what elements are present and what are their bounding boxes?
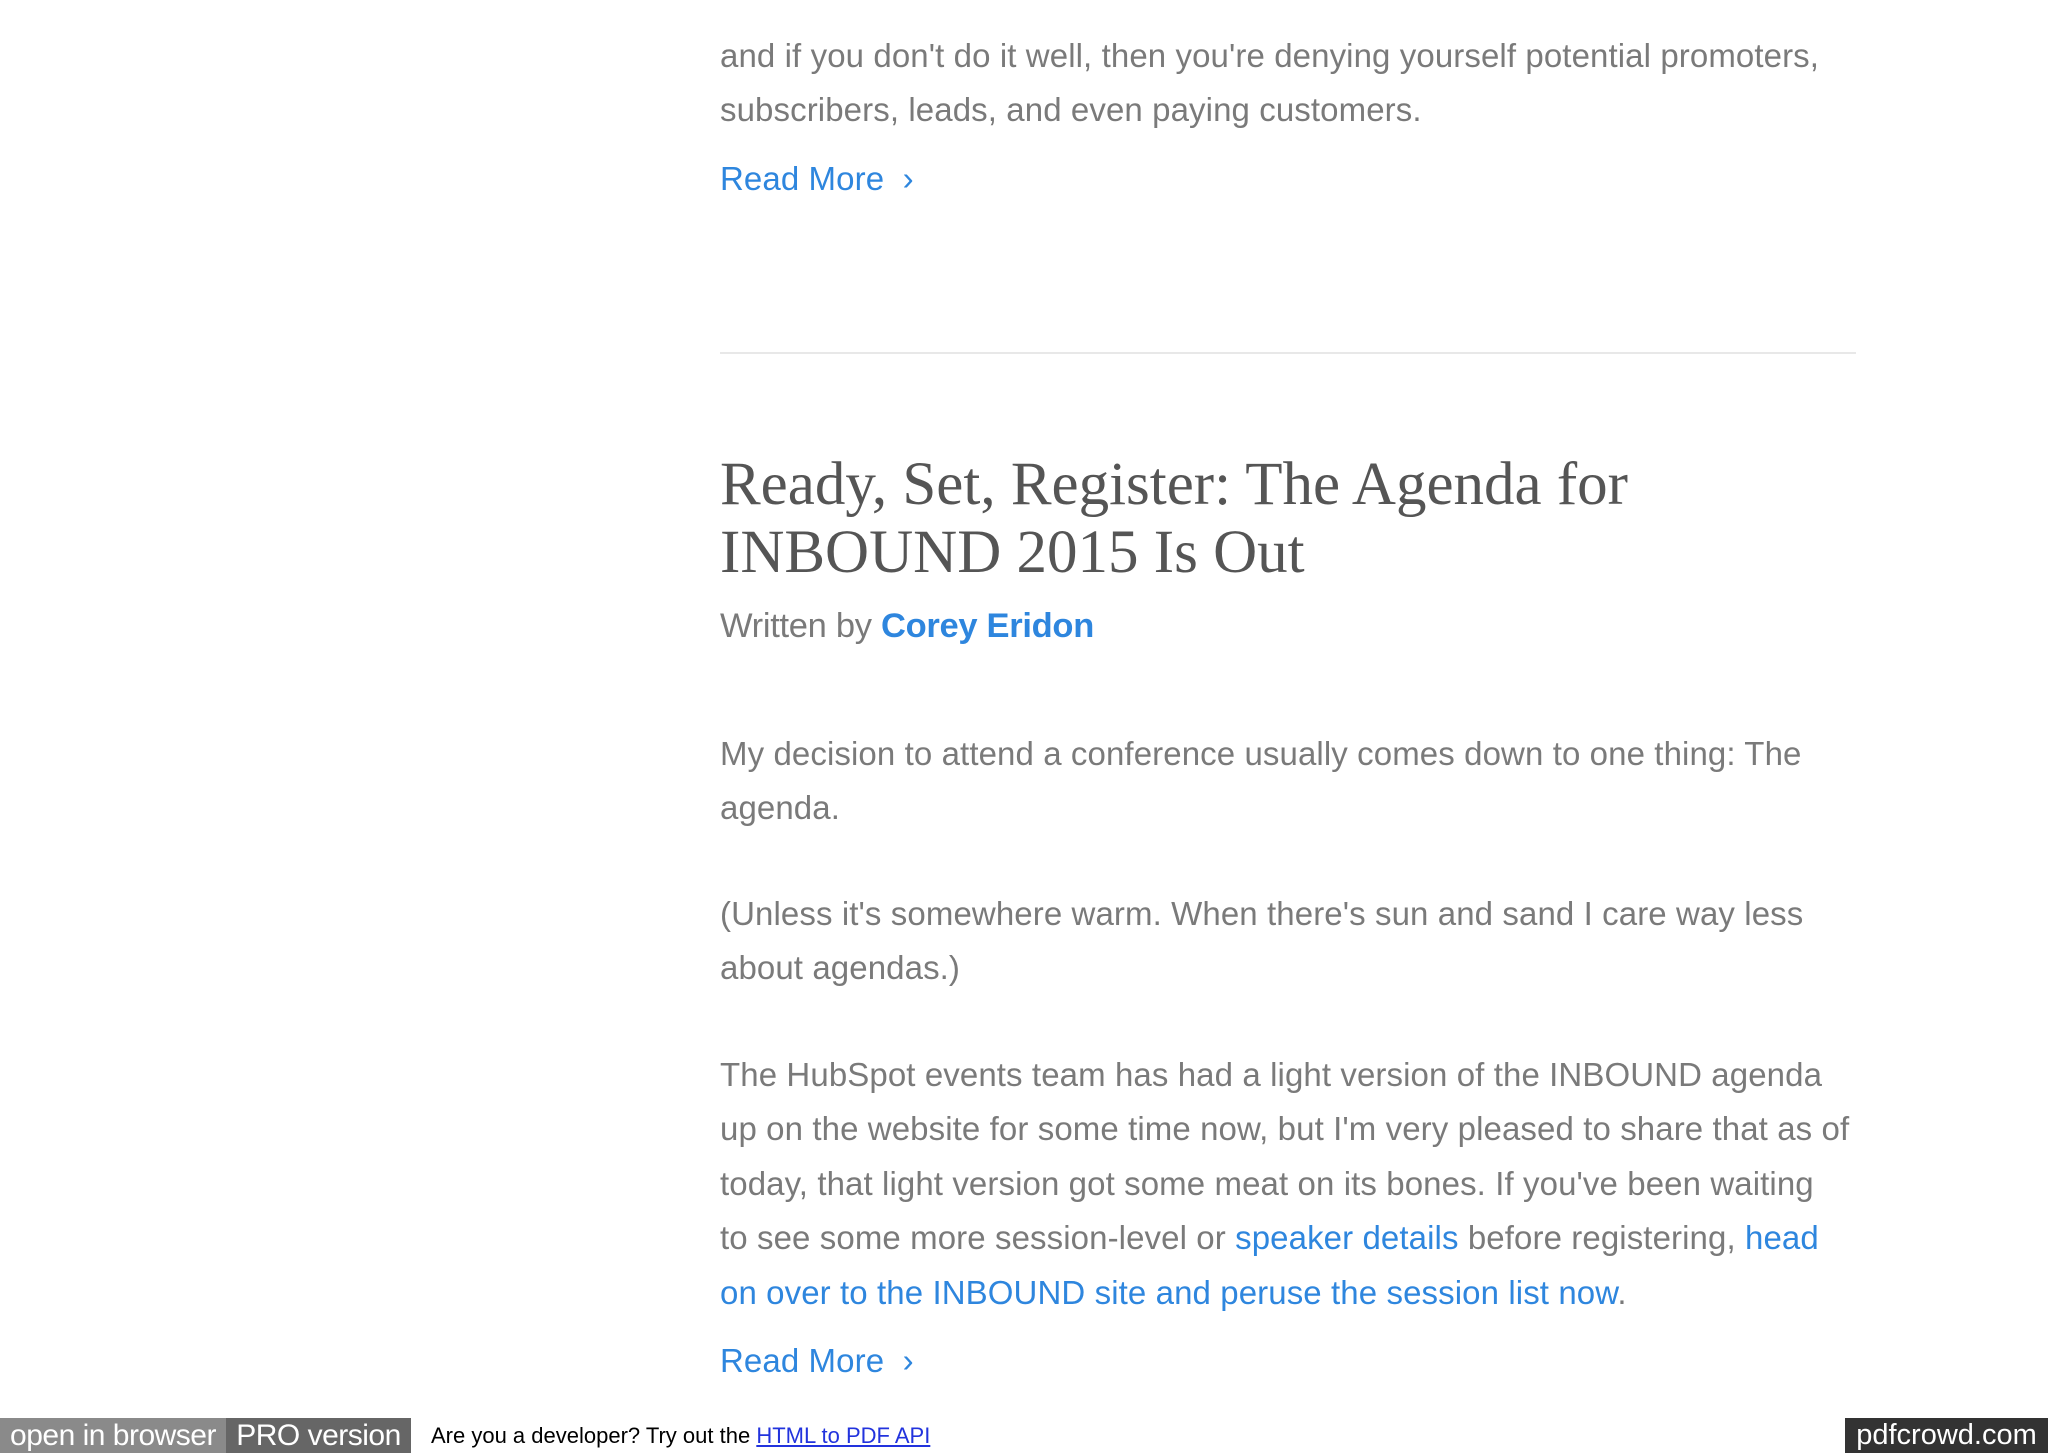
text block: intro ending: and if you don't do it well, then you're denying yourself potential promoters, <box>720 37 1819 74</box>
footer bar: Are you a developer? Try out the HTML to PDF API <box>431 1423 930 1448</box>
text block: paragraph 2: about agendas.) <box>720 949 960 986</box>
text block: paragraph 1: My decision to attend a conference usually comes down to one thing: The <box>720 735 1801 772</box>
footer bar: pdfcrowd.com <box>1856 1419 2037 1451</box>
text block: paragraph 2: (Unless it's somewhere warm. When there's sun and sand I care way less <box>720 895 1803 932</box>
byline: Written by Corey Eridon <box>720 607 1094 645</box>
heading: post title: Ready, Set, Register: The Agenda for <box>720 451 1628 518</box>
footer bar <box>0 1418 2048 1453</box>
text block: paragraph 3: on over to the INBOUND site and peruse the session list now. <box>720 1274 1627 1311</box>
text block: paragraph 3 <box>720 1056 1850 1311</box>
footer bar: PRO version <box>236 1419 401 1452</box>
text block: paragraph 1: agenda. <box>720 789 840 826</box>
text block: paragraph 3: to see some more session-level or speaker details before registering, head <box>720 1219 1819 1256</box>
link: read more 2: Read More › <box>720 1342 914 1379</box>
text block: paragraph 1 <box>720 735 1801 826</box>
footer bar: open in browser <box>10 1419 216 1452</box>
text block: paragraph 2 <box>720 895 1803 986</box>
text block: paragraph 3: up on the website for some time now, but I'm very pleased to share that as of <box>720 1110 1849 1147</box>
link: read more 1: Read More › <box>720 160 914 197</box>
text block: intro ending: subscribers, leads, and even paying customers. <box>720 91 1422 128</box>
text block: paragraph 3: The HubSpot events team has had a light version of the INBOUND agenda <box>720 1056 1822 1093</box>
text block: paragraph 3: today, that light version got some meat on its bones. If you've been waiting <box>720 1165 1814 1202</box>
heading: post title <box>720 451 1628 586</box>
heading: post title: INBOUND 2015 Is Out <box>720 519 1305 586</box>
text block: intro ending <box>720 37 1819 128</box>
